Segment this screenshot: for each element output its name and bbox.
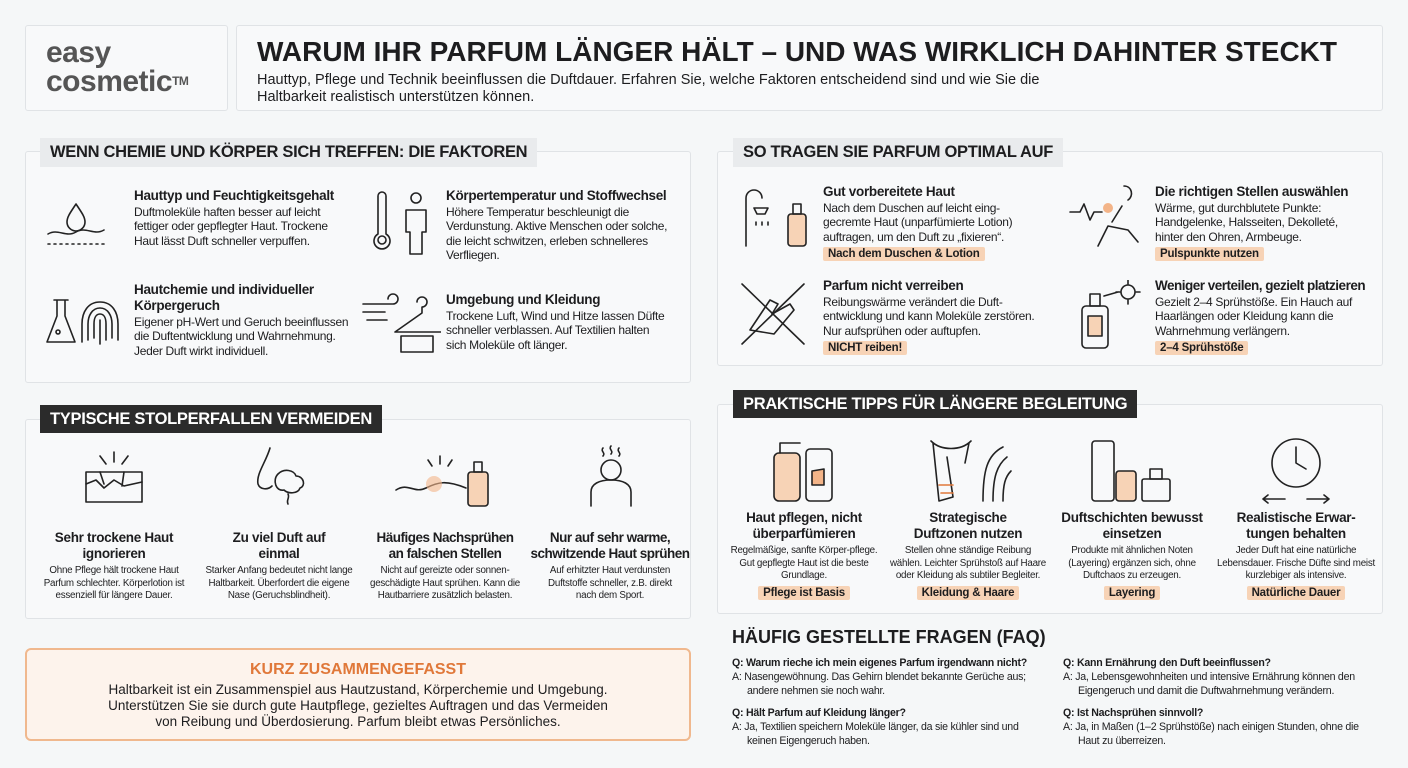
heading: practical tips <box>733 390 1137 418</box>
panel: pitfalls <box>25 419 691 619</box>
faq right <box>1063 657 1359 747</box>
title box <box>236 25 1383 111</box>
tip: targeted: 2–4 Sprühstöße <box>1160 342 1243 354</box>
pitfall 3: Nicht auf gereizte oder sonnen-geschädigte Haut sprühen. Kann die Hautbarriere zusätzlich belasten. <box>370 565 520 601</box>
practical 2: Kleidung & Haare <box>922 586 1014 598</box>
logo <box>25 25 228 111</box>
faq right: Q: Ist Nachsprühen sinnvoll? <box>1063 707 1203 719</box>
icon: bottle target <box>1081 280 1141 349</box>
icon: nose cloud <box>256 447 304 505</box>
icon: cracked skin <box>85 451 143 503</box>
pitfall 1: Ohne Pflege hält trockene Haut Parfum schlechter. Körperlotion ist essenziell für längere Dauer. <box>44 565 184 601</box>
factor 4: Trockene Luft, Wind und Hitze lassen Düfte schneller verblassen. Auf Textilien halten sich Moleküle oft länger. <box>446 309 664 352</box>
icon: shower lotion <box>745 189 807 247</box>
pitfall 3: Häufiges Nachsprühen an falschen Stellen <box>376 530 514 561</box>
heading: practical tips: PRAKTISCHE TIPPS FÜR LÄNGERE BEGLEITUNG <box>743 395 1127 413</box>
tip: right spots: Wärme, gut durchblutete Punkte: Handgelenke, Halsseiten, Dekolleté, hinter den Ohren, Armbeuge. <box>1155 201 1338 244</box>
logo: easy <box>46 36 111 69</box>
faq right: A: Ja, Lebensgewohnheiten und intensive Ernährung können den Eigengeruch und damit die Duftwahrnehmung verändern. <box>1063 671 1355 697</box>
pitfall 1 <box>44 451 184 601</box>
icon: layering products <box>1091 440 1171 502</box>
icon: clock <box>1262 438 1330 504</box>
factor 1 <box>134 188 334 248</box>
practical 3: Layering <box>1109 586 1155 598</box>
icon: skin drop <box>47 203 105 245</box>
summary box <box>25 648 691 741</box>
icon: hands crossed <box>741 283 805 345</box>
practical 3 <box>1061 440 1203 600</box>
tip: prepared skin: Gut vorbereitete Haut <box>823 184 955 199</box>
summary box: Haltbarkeit ist ein Zusammenspiel aus Hautzustand, Körperchemie und Umgebung. <box>108 682 608 697</box>
panel: application <box>717 151 1383 366</box>
heading: pitfalls: TYPISCHE STOLPERFALLEN VERMEIDEN <box>50 410 372 428</box>
practical 2: Strategische Duftzonen nutzen <box>914 510 1022 541</box>
tip: prepared skin: Nach dem Duschen auf leicht eing-gecremte Haut (unparfümierte Lotion) auftragen, um den Duft zu „fixieren“. <box>823 201 1012 244</box>
icon: sweating person <box>590 445 632 507</box>
practical 1 <box>731 442 877 600</box>
practical 4: Jeder Duft hat eine natürliche Lebensdauer. Frische Düfte sind meist kurzlebiger als intensive. <box>1217 545 1375 581</box>
tip: no rubbing: Parfum nicht verreiben <box>823 278 963 293</box>
pitfall 2 <box>205 447 353 601</box>
heading: faq: HÄUFIG GESTELLTE FRAGEN (FAQ) <box>732 627 1046 647</box>
faq right: Q: Kann Ernährung den Duft beeinflussen? <box>1063 657 1271 669</box>
faq left: Q: Hält Parfum auf Kleidung länger? <box>732 707 906 719</box>
pitfall 3 <box>370 455 520 601</box>
faq left: A: Nasengewöhnung. Das Gehirn blendet bekannte Gerüche aus; andere nehmen sie noch wahr. <box>732 671 1026 697</box>
title box: WARUM IHR PARFUM LÄNGER HÄLT – UND WAS WIRKLICH DAHINTER STECKT <box>257 36 1337 67</box>
factor 1: Duftmoleküle haften besser auf leicht fettiger oder gepflegter Haut. Trockene Haut lässt Duft schneller verpuffen. <box>134 205 328 248</box>
tip: right spots <box>1155 184 1348 261</box>
summary box: von Reibung und Überdosierung. Parfum bleibt etwas Persönliches. <box>155 714 561 729</box>
tip: prepared skin <box>823 184 1012 261</box>
title box: Hauttyp, Pflege und Technik beeinflussen die Duftdauer. Erfahren Sie, welche Faktoren entscheidend sind und wie Sie die Haltbarkeit realistisch unterstützen können. <box>257 72 1039 105</box>
factor 3: Hautchemie und individueller Körpergeruch <box>134 282 314 313</box>
heading: factors <box>40 138 537 167</box>
factor 3: Eigener pH-Wert und Geruch beeinflussen die Duftentwicklung und Wahrnehmung. Jeder Duft wirkt individuell. <box>134 315 348 358</box>
faq left <box>732 657 1027 747</box>
pitfall 1: Sehr trockene Haut ignorieren <box>55 530 173 561</box>
summary box: KURZ ZUSAMMENGEFASST <box>250 661 466 678</box>
faq right: A: Ja, in Maßen (1–2 Sprühstöße) nach einigen Stunden, ohne die Haut zu überreizen. <box>1063 721 1359 747</box>
tip: no rubbing: Reibungswärme verändert die Duft-entwicklung und kann Moleküle zerstören. Nur aufsprühen oder auftupfen. <box>823 295 1034 338</box>
pitfall 2: Zu viel Duft auf einmal <box>233 530 325 561</box>
panel: factors <box>25 151 691 383</box>
practical 3: Duftschichten bewusst einsetzen <box>1061 510 1203 541</box>
icon: lotion hand <box>773 442 833 502</box>
practical 1: Regelmäßige, sanfte Körper-pflege. Gut gepflegte Haut ist die beste Grundlage. <box>731 545 877 581</box>
heading: pitfalls <box>40 405 382 433</box>
panel: practical tips <box>717 404 1383 614</box>
tip: right spots: Pulspunkte nutzen <box>1160 248 1259 260</box>
factor 4: Umgebung und Kleidung <box>446 292 600 307</box>
practical 3: Produkte mit ähnlichen Noten (Layering) ergänzen sich, ohne Duftchaos zu erzeugen. <box>1068 545 1196 581</box>
tip: no rubbing <box>823 278 1034 355</box>
tip: targeted: Weniger verteilen, gezielt platzieren <box>1155 278 1365 293</box>
factor 1: Hauttyp und Feuchtigkeitsgehalt <box>134 188 334 203</box>
summary box: Unterstützen Sie sie durch gute Hautpflege, gezieltes Auftragen und das Vermeiden <box>108 698 608 713</box>
tip: right spots: Die richtigen Stellen auswählen <box>1155 184 1348 199</box>
practical 2 <box>890 440 1046 600</box>
icon: pulse points <box>1069 185 1139 247</box>
tip: targeted <box>1155 278 1365 355</box>
pitfall 4: Auf erhitzter Haut verdunsten Duftstoffe schneller, z.B. direkt nach dem Sport. <box>548 565 672 601</box>
icon: scarf hair <box>930 440 1012 502</box>
practical 1: Haut pflegen, nicht überparfümieren <box>746 510 862 541</box>
factor 3 <box>134 282 348 358</box>
practical 2: Stellen ohne ständige Reibung wählen. Leichter Sprühstoß auf Haare oder Kleidung als subtiler Begleiter. <box>890 545 1046 581</box>
tip: targeted: Gezielt 2–4 Sprühstöße. Ein Hauch auf Haarlängen oder Kleidung kann die Wahrnehmung verlängern. <box>1155 295 1352 338</box>
pitfall 4 <box>530 445 690 601</box>
tip: prepared skin: Nach dem Duschen & Lotion <box>828 248 980 260</box>
practical 4: Realistische Erwar-tungen behalten <box>1237 510 1355 541</box>
icon: flask fingerprint <box>46 299 119 345</box>
tip: no rubbing: NICHT reiben! <box>828 342 902 354</box>
practical 4: Natürliche Dauer <box>1252 586 1340 598</box>
faq left: Q: Warum rieche ich mein eigenes Parfum irgendwann nicht? <box>732 657 1027 669</box>
factor 2: Höhere Temperatur beschleunigt die Verdunstung. Aktive Menschen oder solche, die leicht schwitzen, erleben schnelleres Verfliegen. <box>446 205 667 262</box>
heading: application: SO TRAGEN SIE PARFUM OPTIMAL AUF <box>743 143 1053 161</box>
heading: application <box>733 138 1063 167</box>
faq left: A: Ja, Textilien speichern Moleküle länger, da sie kühler sind und keinen Eigengeruch haben. <box>732 721 1019 747</box>
heading: factors: WENN CHEMIE UND KÖRPER SICH TREFFEN: DIE FAKTOREN <box>50 143 527 161</box>
practical 1: Pflege ist Basis <box>763 586 845 598</box>
practical 4 <box>1217 438 1376 600</box>
logo: cosmeticTM <box>46 65 188 98</box>
factor 2: Körpertemperatur und Stoffwechsel <box>446 188 666 203</box>
pitfall 4: Nur auf sehr warme, schwitzende Haut sprühen <box>530 530 690 561</box>
icon: wind hanger <box>362 293 441 353</box>
icon: thermometer person <box>373 191 427 255</box>
pitfall 2: Starker Anfang bedeutet nicht lange Haltbarkeit. Überfordert die eigene Nase (Geruchsblindheit). <box>205 565 353 601</box>
icon: spray skin <box>395 455 489 507</box>
